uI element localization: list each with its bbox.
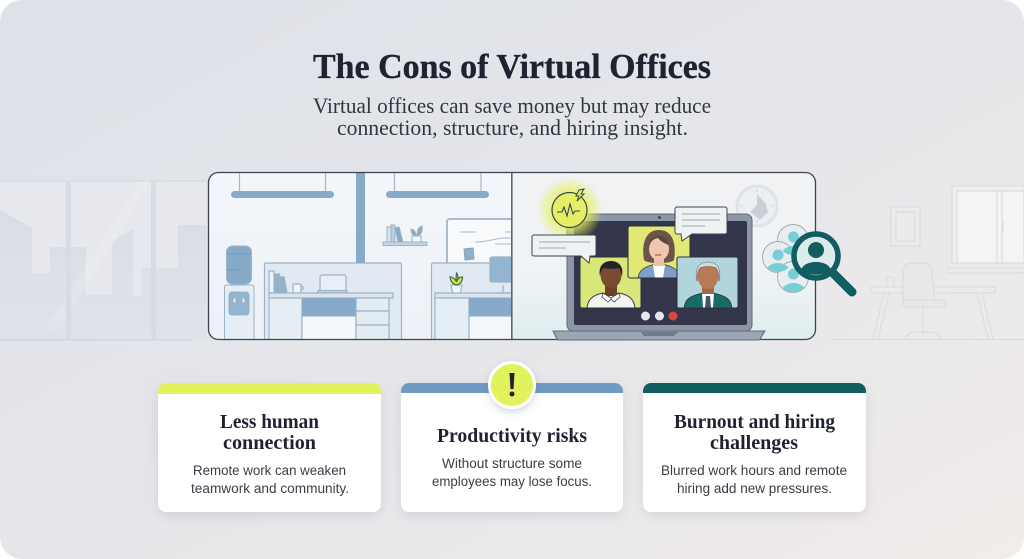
water cooler xyxy=(224,246,254,341)
whiteboard xyxy=(446,218,511,262)
laptop xyxy=(553,214,765,340)
body text xyxy=(191,463,349,496)
ceiling lamps xyxy=(231,173,489,198)
panel: traditional office xyxy=(208,172,525,343)
subtitle: Virtual offices can save money but may reduce xyxy=(313,93,711,118)
heading: Productivity risks xyxy=(437,425,587,447)
heading: Less human xyxy=(220,411,319,433)
heading: Burnout and hiring xyxy=(674,411,835,433)
body text: Blurred work hours and remote xyxy=(661,463,847,478)
background: city window xyxy=(0,180,206,340)
icon: stress pulse xyxy=(537,177,603,243)
speech bubble right xyxy=(675,207,727,241)
heading xyxy=(220,411,319,454)
cubicle desk with laptop xyxy=(264,263,402,343)
subtitle: connection, structure, and hiring insight. xyxy=(337,115,688,140)
title: The Cons of Virtual Offices xyxy=(313,47,711,86)
video tile: older man in green suit xyxy=(677,257,738,308)
icon: warning badge xyxy=(490,362,534,408)
heading: challenges xyxy=(710,432,798,454)
cubicle desk with monitor and plant xyxy=(430,256,511,339)
video tile: woman in blue blazer xyxy=(628,226,690,278)
body text: employees may lose focus. xyxy=(432,474,592,489)
body text xyxy=(661,463,847,496)
clock xyxy=(737,186,777,226)
card: burnout and hiring challenges xyxy=(643,383,866,512)
call controls xyxy=(641,312,678,320)
icon: candidates under magnifier xyxy=(762,224,852,301)
column xyxy=(356,173,365,263)
background: home office line art xyxy=(832,186,1024,340)
card: less human connection xyxy=(158,383,381,512)
body text: Remote work can weaken xyxy=(193,463,346,478)
heading: connection xyxy=(223,432,316,454)
subtitle xyxy=(313,93,711,140)
body text xyxy=(432,456,592,489)
body text: teamwork and community. xyxy=(191,481,349,496)
heading xyxy=(674,411,835,454)
panel: illustration frame xyxy=(208,172,852,343)
body text: Without structure some xyxy=(442,456,582,471)
card: productivity risks xyxy=(401,362,623,512)
body text: hiring add new pressures. xyxy=(677,481,832,496)
frame outline xyxy=(208,172,816,340)
wall shelf with books and plant xyxy=(383,225,427,246)
video tile: man in white shirt xyxy=(580,257,641,308)
speech bubble left xyxy=(532,235,596,263)
